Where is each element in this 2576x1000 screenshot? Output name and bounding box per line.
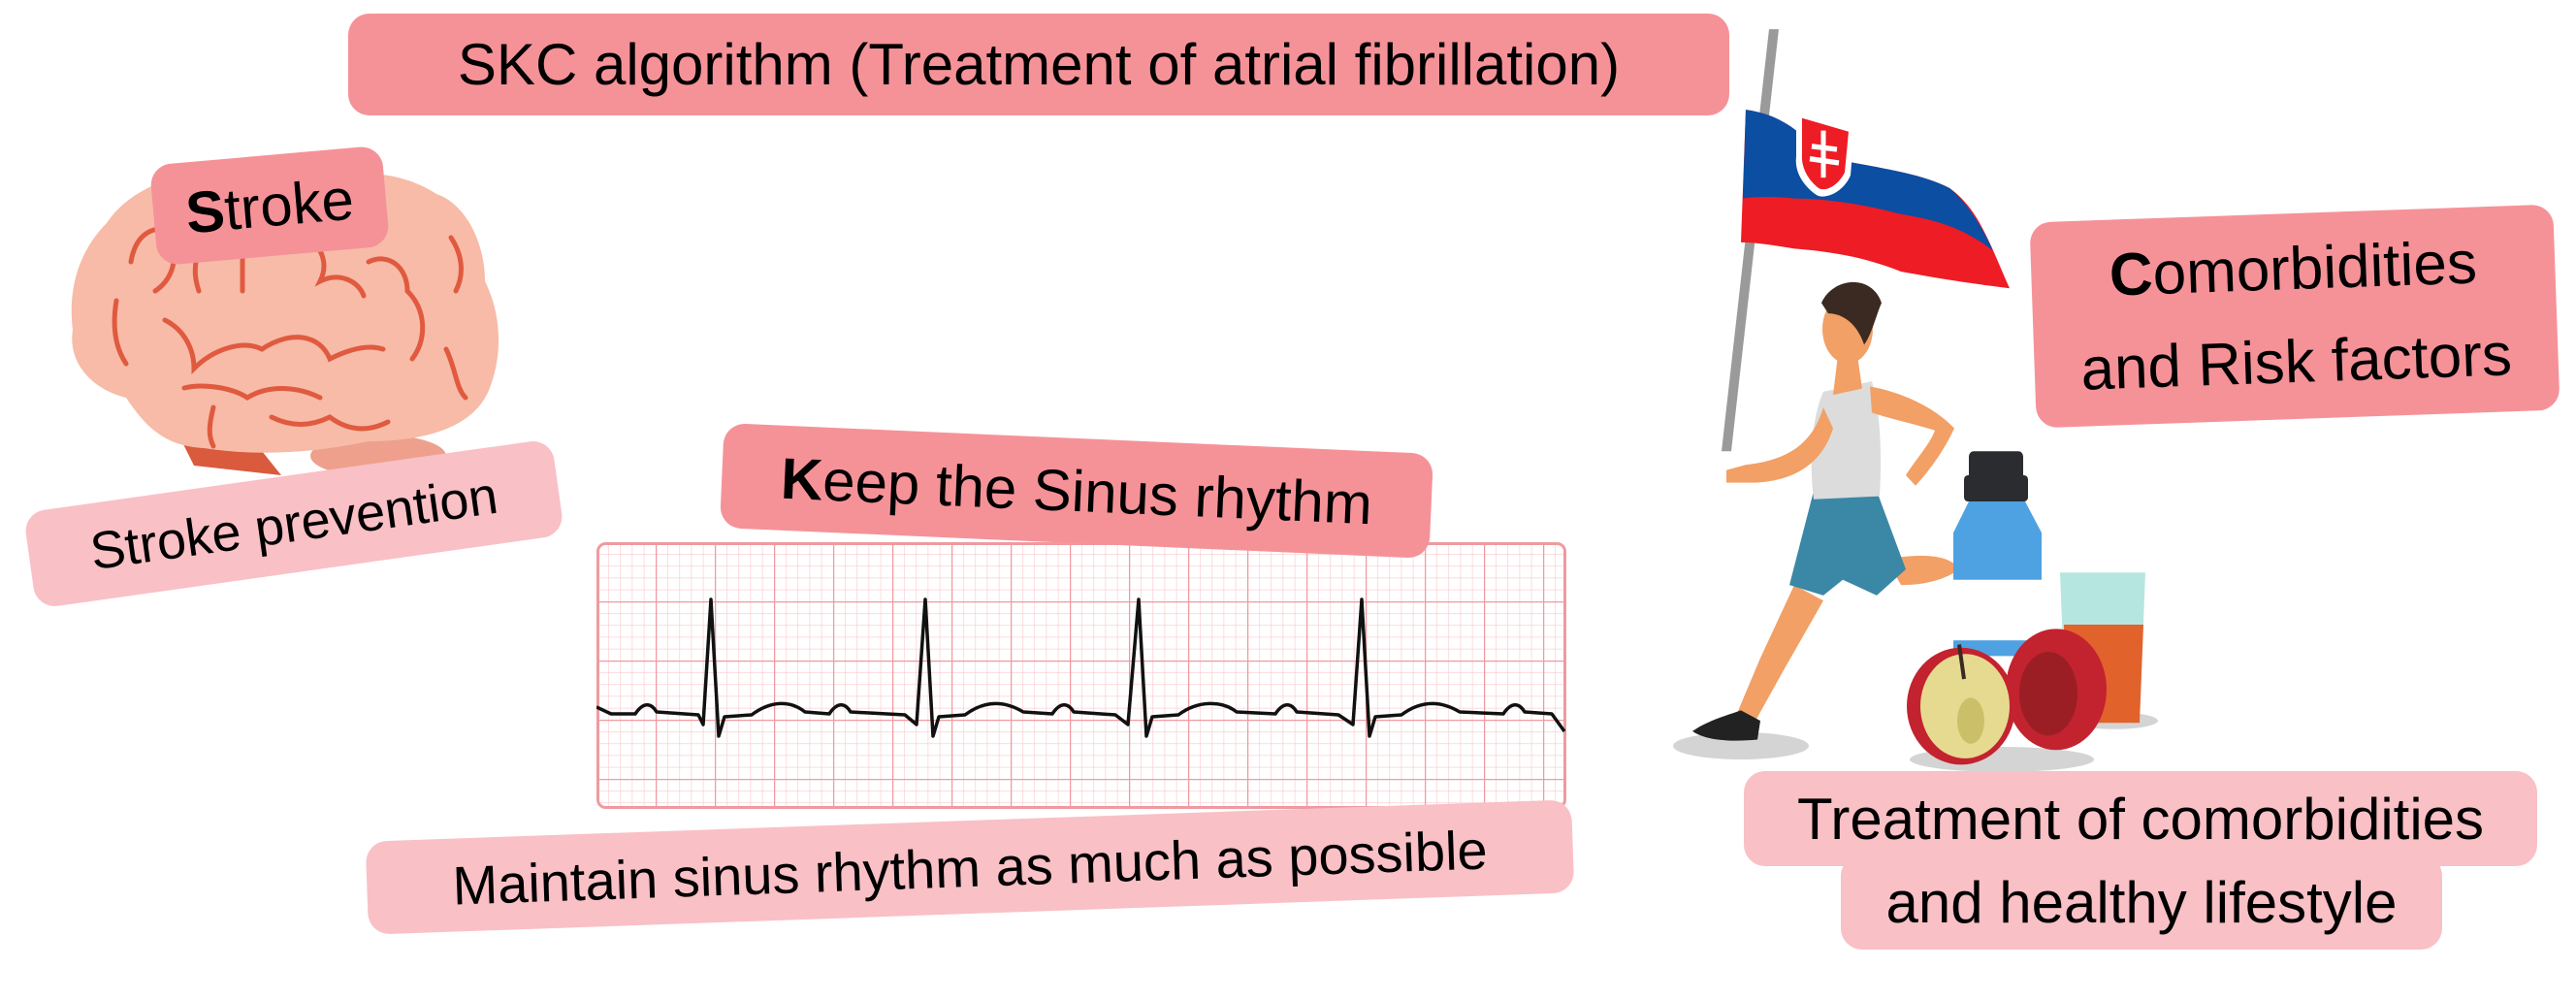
heading: Stroke	[149, 145, 390, 266]
heading: Comorbidities and Risk factors: and Risk factors	[2079, 321, 2513, 403]
text block: Stroke prevention	[23, 438, 564, 609]
heading: Keep the Sinus rhythm	[720, 423, 1433, 559]
icon: water bottle	[1953, 451, 2042, 656]
heading: Stroke: troke	[222, 166, 356, 242]
heading: Stroke: S	[183, 177, 227, 245]
heading: Comorbidities and Risk factors: Comorbidities	[2109, 229, 2478, 309]
text block: Maintain sinus rhythm	[366, 799, 1574, 935]
icon: brain	[72, 166, 499, 477]
icon: juice glass	[2060, 572, 2158, 729]
text block: Stroke prevention: Stroke prevention	[86, 467, 501, 581]
chart: ECG strip	[596, 542, 1566, 809]
icon: apples	[1907, 629, 2107, 772]
heading: Keep the Sinus rhythm: eep the Sinus rhythm	[821, 447, 1373, 536]
heading: Keep the Sinus rhythm: K	[780, 445, 824, 512]
icon: running man	[1673, 282, 1959, 759]
text block: Treatment of comorbidities: and healthy lifestyle	[1885, 869, 2398, 935]
heading: Comorbidities and Risk factors	[2029, 205, 2560, 428]
text block: Treatment of comorbidities	[1744, 771, 2537, 950]
text block: Treatment of comorbidities: Treatment of comorbidities	[1797, 786, 2484, 852]
title	[348, 14, 1729, 115]
title: SKC algorithm (Treatment of atrial fibrillation)	[458, 32, 1620, 97]
icon: flag pole and flag	[1722, 29, 2010, 451]
text block: Maintain sinus rhythm: Maintain sinus rhythm as much as possible	[451, 819, 1489, 916]
